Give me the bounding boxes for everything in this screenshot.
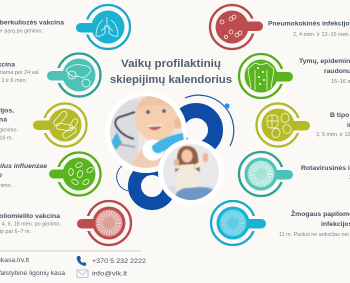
icon: bacteria (33, 104, 86, 146)
panel: type B Haemophilus (256, 104, 350, 146)
title: Vaikų profilaktinių (121, 58, 221, 70)
photo: baby being vaccinated (105, 91, 187, 176)
text block (0, 108, 18, 142)
icon: papillomavirus (211, 201, 266, 245)
text block (0, 163, 47, 189)
text block (301, 165, 350, 181)
title: skiepijimų kalendorius (110, 74, 232, 86)
icon: bacilli (49, 152, 100, 196)
icon: rotavirus (239, 152, 293, 196)
icon: lungs (76, 5, 130, 49)
panel: human papillomavirus (211, 201, 350, 245)
footer: web and institution (0, 257, 65, 277)
icon: liver (47, 54, 100, 96)
title (110, 58, 232, 86)
text block: 2, 4 mėn. ir 12–15 mėn. (293, 32, 350, 38)
decorative blue rings (117, 95, 234, 204)
text block (268, 20, 350, 38)
footer: contacts: +370 5 232 2222 (92, 258, 146, 265)
panel: polio vaccine (0, 201, 131, 245)
text block (279, 209, 350, 238)
photo: child with thumbs up (158, 139, 224, 205)
icon: torso with rash (239, 54, 293, 98)
icon: capsules (256, 104, 310, 146)
panel: Haemophilus influenzae vaccine (0, 152, 100, 196)
icon: poliovirus (77, 201, 131, 245)
panel: diphtheria, tetanus, pertussis vaccine (0, 104, 86, 146)
icon: pneumococci (210, 5, 263, 49)
panel: pneumococcal infection (210, 5, 350, 49)
white connector behind child photo (142, 140, 164, 160)
icon: phone (77, 256, 86, 266)
footer divider (0, 250, 141, 252)
text block (0, 213, 61, 235)
text block (0, 20, 64, 34)
footer: contacts (92, 258, 146, 278)
icon: envelope (77, 270, 88, 278)
text block (316, 112, 350, 138)
panel: tuberculosis vaccine (0, 5, 130, 49)
panel: hepatitis B vaccine (0, 54, 100, 96)
text block (299, 58, 350, 85)
text block (0, 62, 40, 84)
panel: measles, mumps, rubella (239, 54, 350, 98)
footer: contacts: info@vlk.lt (92, 270, 127, 278)
panel: rotavirus (239, 152, 350, 196)
